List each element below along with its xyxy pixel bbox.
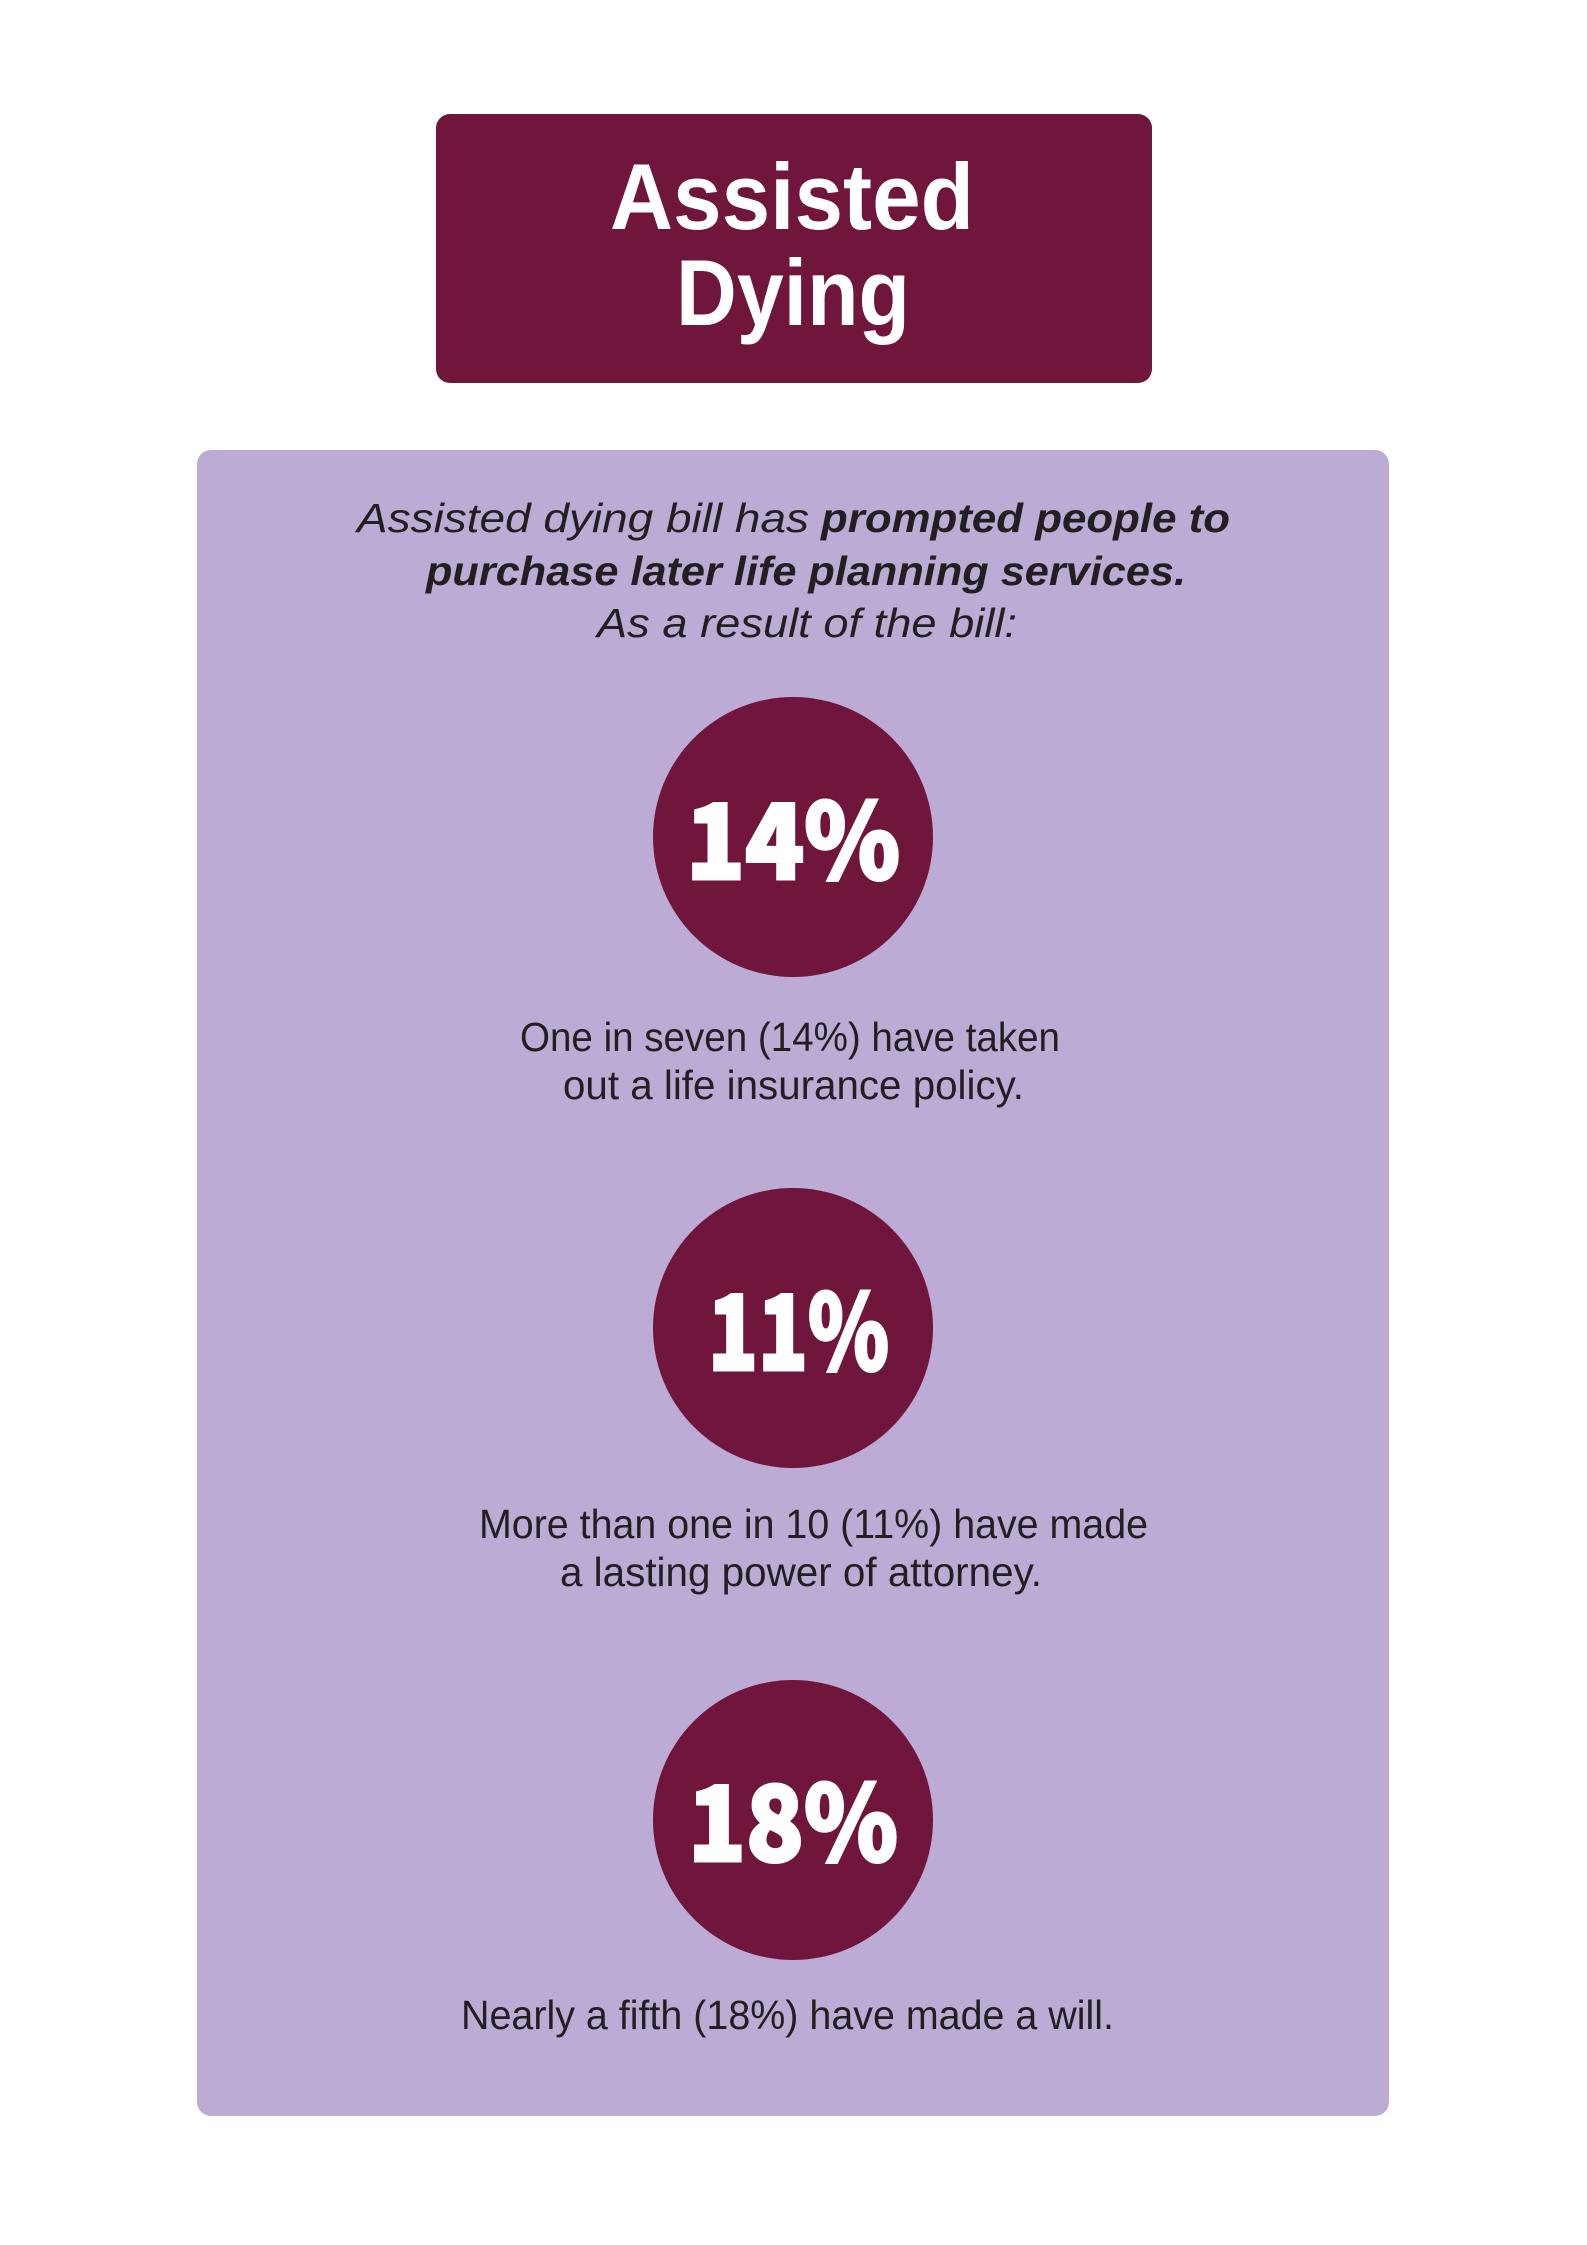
panel: statistics bbox=[197, 450, 1389, 2116]
stat: 11 percent circle bbox=[653, 1188, 933, 1468]
stat: 14 percent circle: 14% bbox=[686, 758, 900, 909]
caption: will: Nearly a fifth (18%) have made a will. bbox=[461, 1992, 1114, 2038]
caption: life insurance bbox=[520, 1014, 1060, 1108]
title banner bbox=[436, 114, 1152, 383]
title text: Assisted bbox=[610, 144, 974, 249]
intro text: purchase later life planning services. bbox=[425, 548, 1186, 594]
intro text: As a result of the bill: bbox=[594, 600, 1017, 646]
intro text: Assisted dying bill has bbox=[354, 495, 809, 541]
caption: life insurance: One in seven (14%) have taken bbox=[520, 1014, 1060, 1060]
title text bbox=[610, 144, 974, 345]
intro text bbox=[354, 495, 1230, 646]
stat: 14 percent circle bbox=[653, 697, 933, 977]
title text: Dying bbox=[676, 240, 910, 345]
intro text: prompted people to bbox=[820, 495, 1230, 541]
caption: lasting power of attorney bbox=[479, 1501, 1148, 1595]
caption: lasting power of attorney: a lasting power of attorney. bbox=[560, 1549, 1042, 1595]
caption: lasting power of attorney: More than one in 10 (11%) have made bbox=[479, 1501, 1148, 1547]
stat: 11 percent circle: 11% bbox=[708, 1249, 889, 1400]
caption: life insurance: out a life insurance policy. bbox=[563, 1062, 1024, 1108]
stat: 18 percent circle bbox=[653, 1680, 933, 1960]
stat: 18 percent circle: 18% bbox=[688, 1740, 898, 1891]
